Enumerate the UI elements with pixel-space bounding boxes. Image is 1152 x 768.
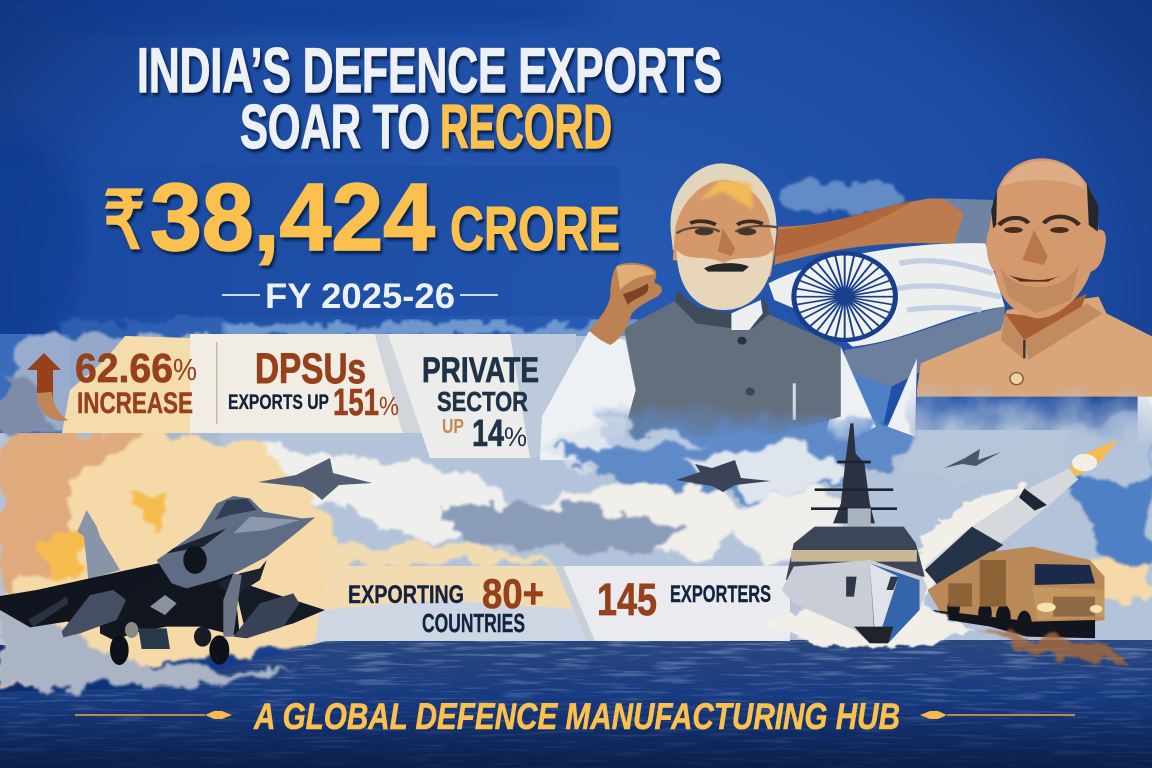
- person: leader with raised fist: [540, 163, 876, 460]
- jet: small left: [258, 458, 372, 500]
- ship, missile and truck: [760, 423, 1119, 647]
- head: [986, 158, 1106, 318]
- jet: small right: [944, 449, 1001, 468]
- title: RECORD: [440, 93, 612, 162]
- headline figure: 38,424: [150, 164, 435, 271]
- flag: [769, 198, 1005, 423]
- panel: increase: [0, 334, 217, 433]
- tagline with arrows: A GLOBAL DEFENCE MANUFACTURING HUB: [253, 696, 900, 737]
- stat: 14%: %: [504, 422, 527, 452]
- truck: [927, 547, 1104, 638]
- headline figure: CRORE: [450, 195, 620, 264]
- water reflection: [975, 630, 1130, 660]
- label: countries: COUNTRIES: [422, 608, 525, 638]
- person: leader at right: [888, 158, 1152, 443]
- label: up: UP: [442, 416, 464, 438]
- stat: 151%: %: [379, 391, 399, 421]
- headline figure: ₹: [103, 176, 145, 265]
- title: SOAR TO: [240, 93, 430, 162]
- wake: [760, 603, 975, 647]
- clouds overlapping lower bodies: [540, 385, 1152, 500]
- near wing: [0, 560, 173, 627]
- label: exporting: EXPORTING: [348, 581, 464, 609]
- title: [137, 36, 722, 162]
- sea mist: [0, 600, 300, 686]
- tail: [77, 510, 120, 579]
- ship mast: [786, 423, 925, 580]
- icon: ashoka chakra: [794, 253, 895, 340]
- stat: 14%: 14: [472, 413, 504, 455]
- label: private: PRIVATE: [422, 351, 539, 390]
- shirt: [888, 358, 917, 437]
- sea: [0, 640, 1152, 768]
- missile: [925, 439, 1119, 588]
- panel: DPSUs: [216, 334, 423, 433]
- fuselage: [157, 496, 315, 588]
- panel: private sector: [388, 334, 576, 458]
- label: exporters: EXPORTERS: [670, 581, 771, 608]
- shirt: [540, 332, 636, 460]
- panel: exporting countries and exporters: [315, 566, 790, 641]
- sea wave streaks: [0, 640, 1152, 768]
- label: exports up: EXPORTS UP: [228, 391, 329, 414]
- missile smoke: [901, 483, 1027, 607]
- head: [670, 163, 776, 250]
- jet: small centre: [676, 460, 771, 492]
- ship hull: [782, 560, 927, 643]
- stat: 62.66%: 62.66: [75, 345, 173, 391]
- label: sector: SECTOR: [437, 386, 528, 417]
- stat: 151%: 151: [333, 382, 379, 424]
- headline figure: [103, 164, 620, 271]
- icon: up arrow: [27, 353, 68, 421]
- sky layer: [0, 430, 1152, 645]
- kurta body: [917, 297, 1152, 397]
- jet: main fighter: [0, 496, 325, 665]
- missiles: [62, 590, 126, 637]
- far wing: [233, 580, 325, 637]
- label: DPSUs: DPSUs: [255, 345, 366, 393]
- band panels: [0, 334, 576, 458]
- fist: [589, 263, 662, 345]
- fiscal year: FY 2025-26: [265, 277, 455, 316]
- stat: 80+: 80+: [482, 570, 544, 617]
- vest: [622, 300, 841, 440]
- title: INDIA’S DEFENCE EXPORTS: [137, 36, 722, 106]
- label: increase: INCREASE: [77, 387, 193, 420]
- stat: 62.66%: %: [173, 352, 197, 387]
- underbody: [100, 560, 240, 640]
- landing gear: [138, 628, 170, 649]
- stat: 145: 145: [597, 574, 657, 625]
